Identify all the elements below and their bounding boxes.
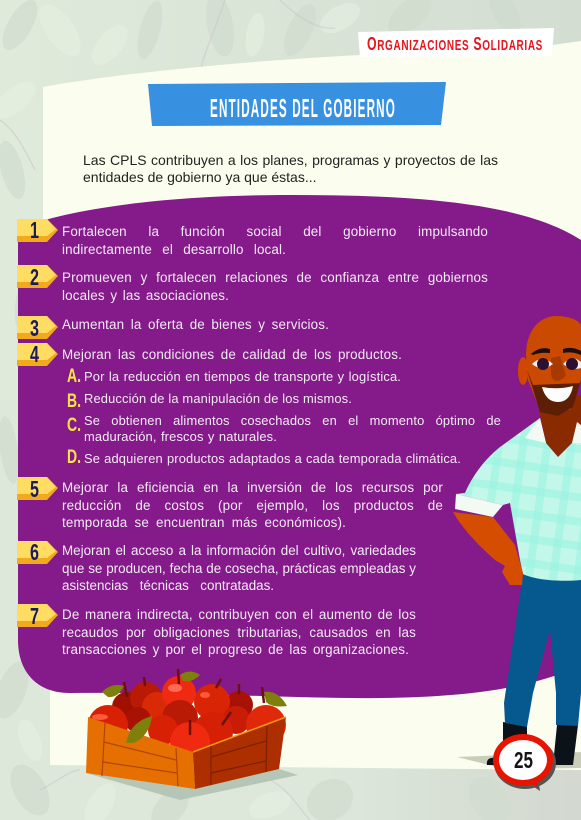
letter A: A. xyxy=(67,366,81,387)
eyes xyxy=(532,358,581,370)
item 6 text: que se producen, fecha de cosecha, prácticas empleadas y xyxy=(62,560,416,576)
number badge 3 xyxy=(17,315,58,341)
item 5 text: reducción de costos (por ejemplo, los productos de xyxy=(62,498,443,512)
item 2 text xyxy=(62,270,488,303)
nose xyxy=(551,356,566,381)
eyebrows xyxy=(531,348,581,355)
item 4D text: Se adquieren productos adaptados a cada temporada climática. xyxy=(84,451,461,466)
letter B: B. xyxy=(67,391,81,412)
section tag xyxy=(358,28,554,57)
floor shadow xyxy=(457,752,581,769)
number badge 6 xyxy=(17,539,58,565)
number badge 1 xyxy=(17,217,58,243)
boots xyxy=(487,722,578,765)
number badge 1: 1 xyxy=(30,217,39,243)
item 2 text: Promueven y fortalecen relaciones de confianza entre gobiernos xyxy=(62,270,488,285)
mouth xyxy=(542,386,573,402)
item 6 text: asistencias técnicas contratadas. xyxy=(62,578,274,593)
item 1 text: Fortalecen la función social del gobierno impulsando xyxy=(62,224,488,239)
front leaf xyxy=(126,716,152,743)
cuff xyxy=(455,494,503,517)
neck xyxy=(538,395,581,457)
title banner xyxy=(148,82,446,126)
head xyxy=(526,316,581,410)
purple panel xyxy=(18,195,581,698)
item 5 text xyxy=(62,480,443,530)
letter D: D. xyxy=(67,447,81,468)
item 1 text xyxy=(62,224,488,256)
character: man xyxy=(453,316,581,765)
collar xyxy=(525,418,581,443)
intro text: entidades de gobierno ya que éstas... xyxy=(83,169,317,185)
number badge 5 xyxy=(17,476,58,502)
item 4C text xyxy=(84,413,501,444)
item 1 text: indirectamente el desarrollo local. xyxy=(62,242,286,256)
item 6 text: Mejoran el acceso a la información del cultivo, variedades xyxy=(62,543,416,558)
apples in a crate xyxy=(86,669,298,800)
number badge 5: 5 xyxy=(30,476,39,502)
item 7 text xyxy=(62,607,416,657)
item 3 text: Aumentan la oferta de bienes y servicios. xyxy=(62,317,329,332)
number badge 4: 4 xyxy=(30,341,39,367)
item 6 text xyxy=(62,543,416,593)
item 4 text: Mejoran las condiciones de calidad de los productos. xyxy=(62,347,402,362)
number badge 7: 7 xyxy=(30,603,39,629)
beard xyxy=(527,370,581,416)
page number bubble xyxy=(493,734,556,791)
item 2 text: locales y las asociaciones. xyxy=(62,288,229,302)
arm and hand xyxy=(453,512,523,585)
number badge 2 xyxy=(17,264,58,290)
section tag: ORGANIZACIONES SOLIDARIAS xyxy=(367,33,543,54)
intro text: Las CPLS contribuyen a los planes, programas y proyectos de las xyxy=(83,152,498,168)
item 7 text: recaudos por obligaciones tributarias, causados en las xyxy=(62,624,416,640)
apples xyxy=(88,676,286,762)
crate right face xyxy=(193,717,286,789)
item 4C text: Se obtienen alimentos cosechados en el momento óptimo de xyxy=(84,413,501,428)
item 7 text: transacciones y por el progreso de las organizaciones. xyxy=(62,642,409,657)
item 5 text: temporada se encuentran más económicos). xyxy=(62,515,346,530)
letter C: C. xyxy=(67,415,81,436)
stems xyxy=(124,669,264,735)
ear xyxy=(518,357,528,385)
number badge 7 xyxy=(17,603,58,629)
number badge 6: 6 xyxy=(30,539,39,565)
item 5 text: Mejorar la eficiencia en la inversión de los recursos por xyxy=(62,480,443,495)
item 7 text: De manera indirecta, contribuyen con el aumento de los xyxy=(62,607,416,622)
shirt xyxy=(456,418,581,581)
trousers xyxy=(504,574,581,727)
item 4B text: Reducción de la manipulación de los mismos. xyxy=(84,391,352,406)
number badge 2: 2 xyxy=(30,264,39,290)
crate left face xyxy=(86,717,195,789)
intro text xyxy=(83,152,498,185)
item 4A text: Por la reducción en tiempos de transporte y logística. xyxy=(84,369,401,384)
item 4C text: maduración, frescos y naturales. xyxy=(84,429,277,444)
crate shadow xyxy=(86,769,298,800)
number badge 4 xyxy=(17,341,58,367)
number badge 3: 3 xyxy=(30,315,39,341)
page number bubble: 25 xyxy=(514,747,533,773)
leaves xyxy=(102,672,287,706)
